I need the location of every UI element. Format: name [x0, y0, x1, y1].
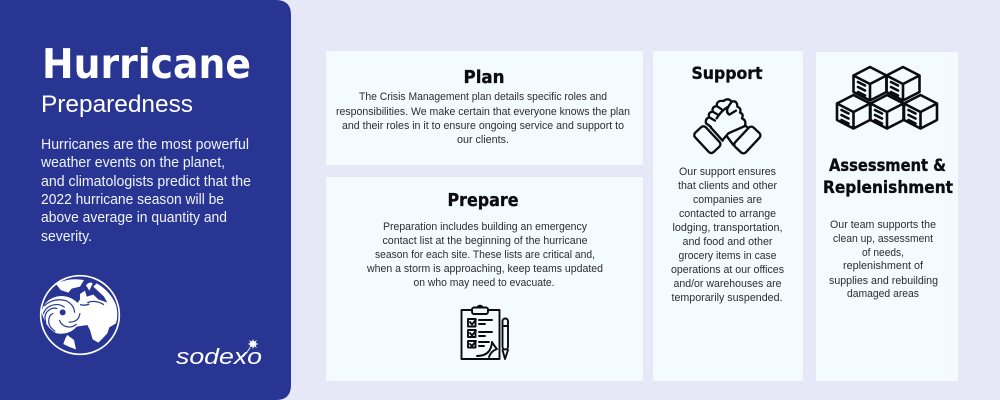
plan text: responsibilities. We make certain that everyone knows the plan: [336, 106, 630, 118]
intro text: severity.: [41, 228, 92, 245]
support text: contacted to arrange: [679, 208, 776, 220]
support text: temporarily suspended.: [672, 292, 782, 304]
plan text: our clients.: [457, 134, 509, 146]
heading: prepare: Prepare: [448, 190, 518, 211]
support text: that clients and other: [678, 180, 777, 192]
assessment text: supplies and rebuilding: [829, 275, 938, 287]
panel: left intro: [0, 0, 291, 400]
plan text: [336, 91, 630, 146]
prepare text: contact list at the beginning of the hurricane: [382, 235, 588, 247]
plan text: The Crisis Management plan details specific roles and: [359, 91, 607, 103]
panel: plan: [326, 51, 643, 165]
heading: assessment and replenishment: [823, 156, 953, 198]
support text: Our support ensures: [679, 166, 776, 178]
intro text: 2022 hurricane season will be: [41, 191, 224, 208]
support text: and food and other: [682, 236, 773, 248]
panel: prepare: [326, 177, 643, 381]
icon: stacked cubes: [837, 67, 937, 128]
intro text: weather events on the planet,: [40, 154, 225, 171]
heading: support: Support: [692, 64, 762, 84]
prepare text: season for each site. These lists are critical and,: [375, 249, 595, 261]
icon: clipboard and pen: [462, 306, 508, 359]
intro text: [40, 136, 251, 245]
assessment text: replenishment of: [843, 260, 924, 272]
support text: lodging, transportation,: [672, 222, 782, 234]
title: Hurricane: [42, 40, 251, 88]
assessment text: damaged areas: [847, 288, 919, 300]
prepare text: Preparation includes building an emergency: [383, 221, 587, 233]
prepare text: when a storm is approaching, keep teams updated: [366, 263, 603, 275]
heading: assessment and replenishment: Assessment &: [829, 156, 946, 176]
support text: operations at our offices: [671, 264, 784, 276]
heading: assessment and replenishment: Replenishment: [823, 178, 953, 198]
support text: companies are: [693, 194, 762, 206]
prepare text: [366, 221, 603, 289]
support text: grocery items in case: [678, 250, 776, 262]
support text: [671, 166, 784, 304]
logo: sodexo: [176, 339, 262, 369]
assessment text: Our team supports the: [830, 219, 936, 231]
panel: assessment and replenishment: [816, 52, 958, 381]
prepare text: on who may need to evacuate.: [414, 277, 554, 289]
intro text: and climatologists predict that the: [41, 173, 251, 190]
assessment text: of needs,: [862, 247, 904, 259]
subtitle: Preparedness: [41, 91, 193, 118]
support text: and/or warehouses are: [674, 278, 782, 290]
heading: plan: Plan: [464, 67, 504, 88]
assessment text: [829, 219, 938, 300]
plan text: and their roles in it to ensure ongoing service and support to: [342, 120, 624, 132]
icon: globe with hurricane: [41, 276, 119, 354]
logo: sodexo: sodexo: [176, 344, 262, 369]
panel: support: [653, 51, 803, 381]
assessment text: clean up, assessment: [833, 233, 933, 245]
intro text: Hurricanes are the most powerful: [41, 136, 249, 153]
intro text: above average in quantity and: [41, 209, 227, 226]
icon: clasped hands: [693, 99, 762, 155]
